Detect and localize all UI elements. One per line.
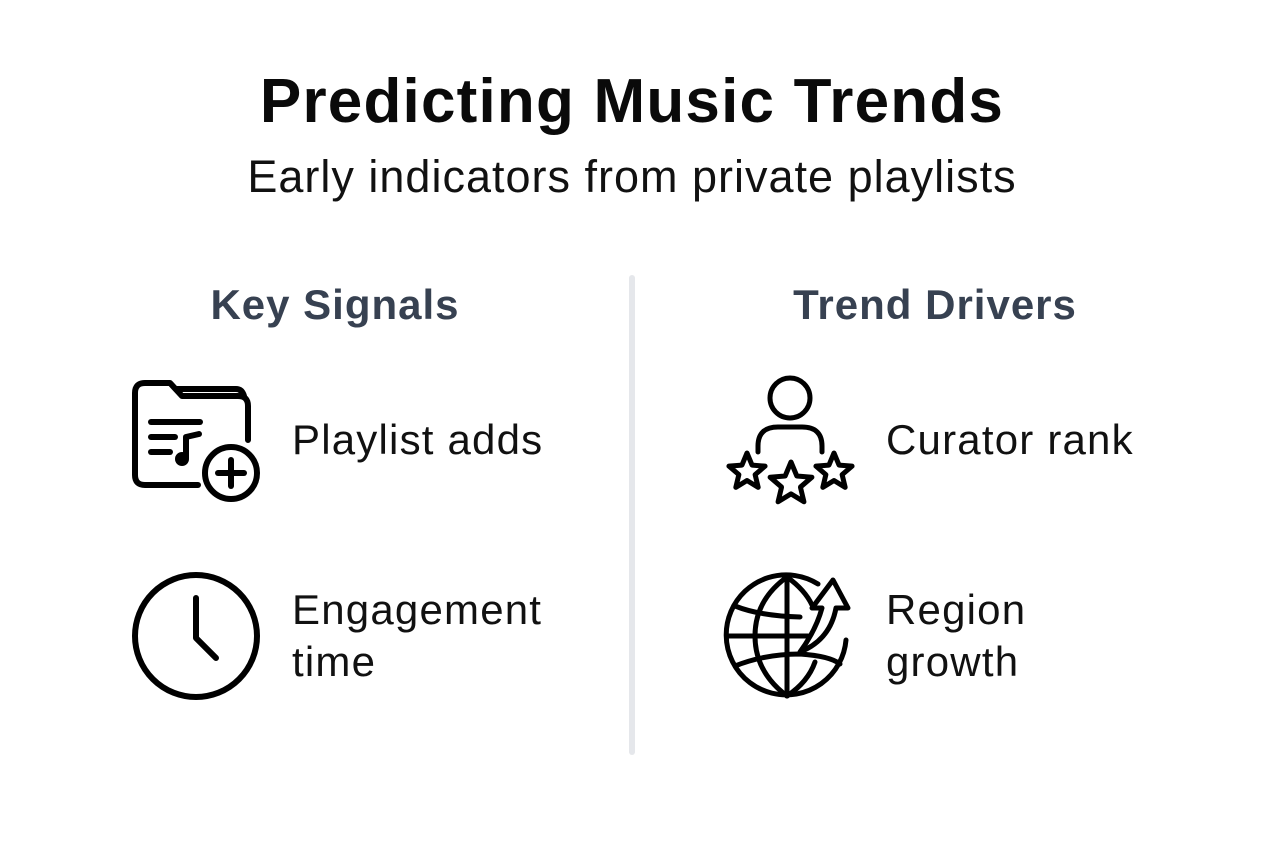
label: region growth: growth — [886, 638, 1019, 685]
divider — [629, 275, 635, 755]
label: region growth — [886, 586, 1026, 685]
label: engagement time: Engagement — [292, 586, 542, 633]
icon: curator with stars — [726, 376, 855, 504]
label: curator rank: Curator rank — [886, 416, 1134, 463]
icon: folder music plus — [132, 380, 260, 502]
heading: key signals: Key Signals — [210, 281, 460, 328]
label: playlist adds: Playlist adds — [292, 416, 543, 463]
subtitle: Early indicators from private playlists — [247, 151, 1017, 202]
label: engagement time — [292, 586, 542, 685]
heading: trend drivers: Trend Drivers — [793, 281, 1077, 328]
title: Predicting Music Trends — [260, 67, 1004, 136]
icon: globe with growth arrow — [724, 572, 850, 698]
icon: clock — [132, 572, 260, 700]
label: region growth: Region — [886, 586, 1026, 633]
label: engagement time: time — [292, 638, 376, 685]
